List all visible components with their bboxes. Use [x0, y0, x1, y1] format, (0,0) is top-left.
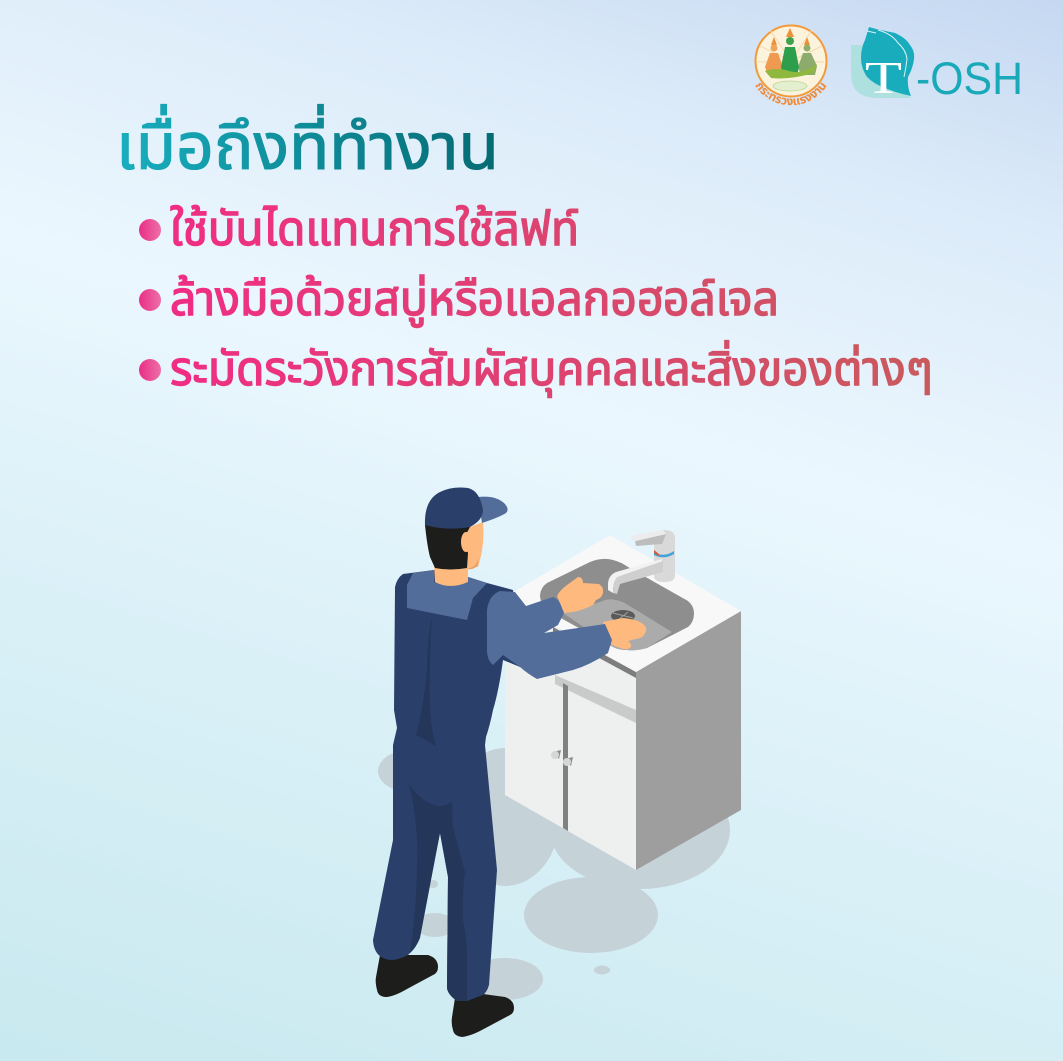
logo: ministry of labour seal	[754, 24, 828, 106]
cabinet side	[636, 611, 741, 870]
jaw shadow	[468, 558, 478, 569]
seal: ministry name: กระทรวงแรงงาน	[755, 82, 827, 106]
collar	[407, 570, 487, 620]
seal: right deity	[798, 37, 817, 75]
seal: left deity	[765, 37, 783, 75]
basin	[540, 559, 694, 650]
shoes	[376, 955, 514, 1037]
drain	[611, 610, 635, 622]
bullet: careful contact: ระมัดระวังการสัมผัสบุคคลและสิ่งของต่างๆ	[170, 340, 933, 397]
basin floor	[563, 599, 672, 650]
counter top	[505, 535, 741, 672]
logo letter T: T	[865, 52, 902, 103]
worker	[373, 488, 646, 1037]
arms	[487, 591, 612, 679]
ear	[461, 532, 471, 552]
logo: T-OSH	[851, 27, 1023, 104]
bullet: wash hands: ล้างมือด้วยสบู่หรือแอลกอฮอล์เจล	[170, 272, 779, 327]
logo mark: white curve	[867, 30, 907, 77]
hair	[425, 525, 470, 570]
logo mark: pale U	[851, 45, 912, 98]
back crease	[416, 617, 436, 746]
sink cabinet	[505, 530, 741, 870]
overalls body	[373, 570, 520, 1001]
cabinet front	[505, 597, 636, 870]
seal: rays	[758, 30, 824, 62]
neck and face	[434, 522, 483, 586]
floor shadows	[378, 748, 730, 1000]
door knobs	[551, 750, 573, 766]
drawer rail	[555, 675, 636, 723]
bullet: stairs: ใช้บันไดแทนการใช้ลิฟท์	[170, 202, 579, 255]
door divider	[563, 683, 568, 831]
bullet list	[139, 202, 933, 397]
title: เมื่อถึงที่ทำงาน	[116, 104, 499, 183]
trouser shadow	[408, 782, 467, 1001]
cap brim	[478, 497, 508, 523]
faucet	[608, 530, 675, 594]
seal: seated legs	[765, 64, 817, 78]
seal: cloud	[773, 81, 807, 91]
cap	[425, 488, 483, 529]
hands	[557, 577, 646, 649]
logo wordmark: -OSH	[916, 53, 1023, 104]
seal: centre deity	[781, 28, 799, 76]
logo mark: teal leaf	[861, 27, 914, 96]
